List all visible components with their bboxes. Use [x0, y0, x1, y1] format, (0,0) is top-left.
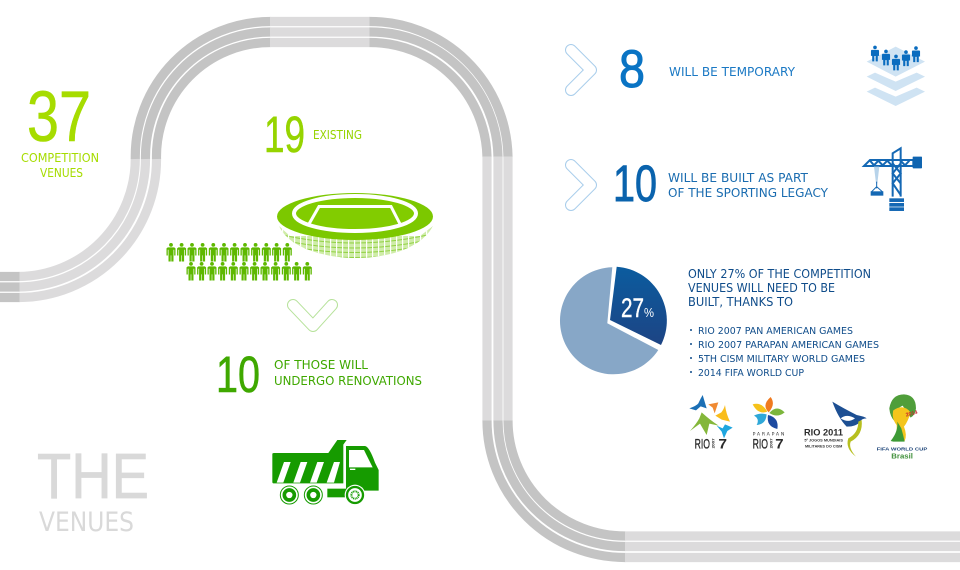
text block: only 27 percent: VENUES WILL NEED TO BE [688, 281, 835, 295]
track: upper left bend [135, 21, 270, 159]
logo: parapan: 7 [775, 436, 784, 451]
stat: 37 competition venues: 37 [27, 78, 91, 157]
logo: rio 2007: 7 [718, 436, 727, 451]
stat: 10 legacy: OF THE SPORTING LEGACY [668, 186, 829, 200]
stat: 37 competition venues: COMPETITION [21, 150, 99, 165]
track: top straight [270, 22, 370, 42]
stat: 10 renovations: 10 [216, 346, 260, 403]
chevron: right 2 [571, 165, 591, 205]
track: bottom straight [625, 536, 960, 558]
logo: rio 2007: RIO [695, 436, 710, 451]
logo: parapan: 2007 [768, 437, 773, 448]
stat: 8 temporary: 8 [619, 40, 645, 99]
stat: 19 existing [264, 106, 362, 163]
stat: 8 temporary [619, 40, 796, 99]
title: the venues: THE [37, 440, 149, 512]
title: the venues [37, 440, 149, 538]
track: left stub [0, 276, 20, 298]
stat: 19 existing: 19 [264, 106, 305, 163]
logo: fifa world cup brasil: Brasil [891, 451, 913, 460]
text block: only 27 percent [688, 267, 871, 309]
logo: fifa world cup brasil: 2014 [905, 410, 918, 419]
logo: rio 2007: 2007 [710, 437, 715, 448]
track: vertical straight [487, 156, 508, 421]
logo: rio 2011: MILITARES DO CISM [805, 443, 843, 448]
chevron: down [293, 305, 332, 326]
icon: construction crane [864, 148, 922, 211]
list: previous games: 2014 FIFA WORLD CUP [698, 368, 804, 379]
logo: fifa world cup brasil [877, 394, 928, 460]
logo: rio 2011 [804, 402, 867, 457]
pie chart: 27 percent [560, 267, 667, 374]
icon: people on layers [867, 46, 925, 106]
stat: 10 renovations: OF THOSE WILL [274, 358, 368, 372]
chevron: right 1 [571, 50, 591, 90]
text block: only 27 percent: ONLY 27% OF THE COMPETITION [688, 267, 871, 281]
stat: 10 legacy [613, 155, 829, 212]
icon: stadium [277, 193, 433, 258]
stat: 10 renovations: UNDERGO RENOVATIONS [274, 374, 422, 388]
stat: 37 competition venues: VENUES [40, 165, 83, 180]
list: previous games [690, 326, 879, 379]
logo: fifa world cup brasil: FIFA WORLD CUP [877, 447, 928, 453]
logo: parapan: RIO [753, 436, 768, 451]
list: previous games: RIO 2007 PARAPAN AMERICAN GAMES [698, 340, 879, 351]
logo: rio 2011: 5º JOGOS MUNDIAIS [804, 437, 843, 442]
pie chart: 27 percent: % [644, 305, 654, 320]
stat: 10 legacy: WILL BE BUILT AS PART [668, 171, 809, 185]
pie chart: 27 percent: 27 [621, 293, 644, 323]
stat: 8 temporary: WILL BE TEMPORARY [669, 65, 796, 79]
stat: 37 competition venues [21, 78, 99, 180]
track: light bend left [19, 158, 157, 298]
logo: rio 2007 [689, 395, 733, 451]
stat: 19 existing: EXISTING [313, 128, 362, 142]
people row: existing venues [166, 243, 312, 280]
stat: 10 renovations [216, 346, 422, 403]
track: lower bend [487, 420, 626, 558]
logo: rio 2011: RIO 2011 [804, 427, 843, 437]
stat: 10 legacy: 10 [613, 155, 657, 212]
logo: parapan: PARAPAN [753, 431, 785, 437]
list: previous games: 5TH CISM MILITARY WORLD GAMES [698, 354, 865, 365]
icon: dump truck [272, 440, 379, 505]
list: previous games: RIO 2007 PAN AMERICAN GAMES [698, 326, 853, 337]
title: the venues: VENUES [39, 507, 134, 538]
logo: parapan [753, 397, 785, 451]
text block: only 27 percent: BUILT, THANKS TO [688, 295, 793, 309]
track: upper right bend [370, 21, 508, 157]
